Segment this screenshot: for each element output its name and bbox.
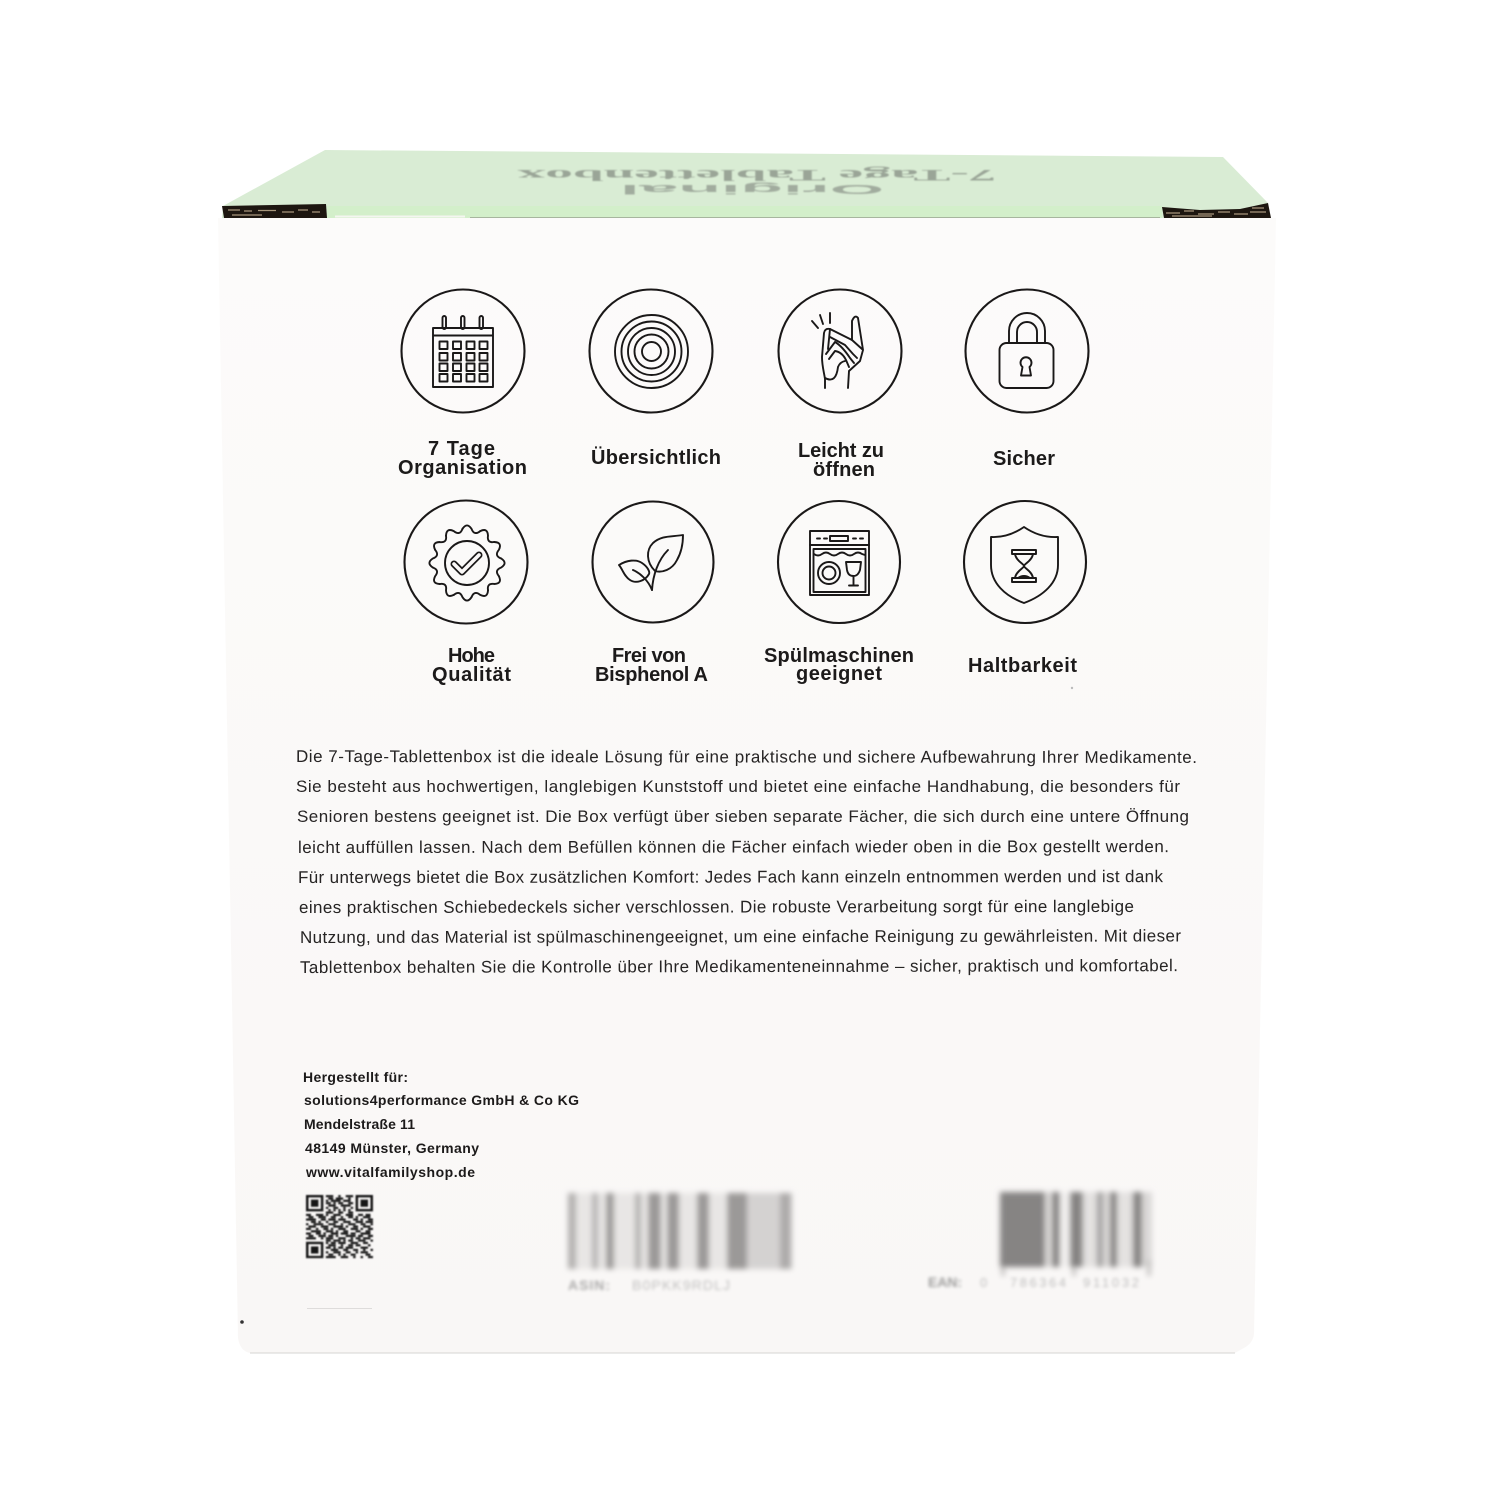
label: Hohe Qualität <box>432 645 511 686</box>
barcode label: EAN: 911032 <box>1083 1275 1139 1290</box>
text block: product description: Die 7-Tage-Tablettenbox ist die ideale Lösung für eine praktische und sichere Aufbewahrung Ihrer Medikamente. <box>296 747 1197 767</box>
barcode label: ASIN: ASIN: <box>568 1277 610 1293</box>
text block: product description: Senioren bestens geeignet ist. Die Box verfügt über sieben separate Fächer, die sich durch eine untere Öffnung <box>297 807 1189 826</box>
label: Leicht zu öffnen: öffnen <box>813 459 875 481</box>
text block: manufacturer address <box>303 1069 579 1180</box>
label: Spülmaschinen geeignet <box>764 645 914 685</box>
barcode label: ASIN <box>568 1277 730 1293</box>
label: Spülmaschinen geeignet: geeignet <box>796 663 882 685</box>
feature: 7 Tage Organisation <box>398 290 527 479</box>
label: Spülmaschinen geeignet: Spülmaschinen <box>764 645 914 667</box>
feature: Spülmaschinen geeignet <box>764 501 914 685</box>
icon: quality seal with check <box>404 500 528 624</box>
text block: product description: Für unterwegs bietet die Box zusätzlichen Komfort: Jedes Fach kann einzeln entnommen werden und ist dank <box>298 867 1164 887</box>
corrugated edge right <box>1162 203 1271 218</box>
lid text: upside-down product name <box>518 166 996 197</box>
label: Leicht zu öffnen: Leicht zu <box>798 440 884 462</box>
icon: dishwasher <box>778 501 900 623</box>
label: Übersichtlich: Übersichtlich <box>591 446 721 469</box>
icon: padlock <box>966 290 1088 412</box>
label: 7 Tage Organisation <box>398 438 527 479</box>
feature: Leicht zu öffnen <box>778 290 902 481</box>
text block: manufacturer address: Hergestellt für: <box>303 1069 408 1085</box>
label: Frei von Bisphenol A: Frei von <box>612 645 686 667</box>
label: Sicher: Sicher <box>993 448 1055 470</box>
barcode label: EAN <box>928 1274 1139 1290</box>
icon: calendar <box>402 290 524 412</box>
feature: Haltbarkeit <box>964 501 1086 677</box>
label: Frei von Bisphenol A: Bisphenol A <box>595 664 708 686</box>
text block: product description: Tablettenbox behalten Sie die Kontrolle über Ihre Medikamenteneinnahme – sicher, praktisch und komfortabel. <box>300 956 1178 977</box>
feature: Hohe Qualität <box>404 500 528 686</box>
label: Hohe Qualität: Hohe <box>448 645 495 667</box>
label: Hohe Qualität: Qualität <box>432 664 511 686</box>
panel: box lid (green top face) <box>222 150 1271 218</box>
feature: Frei von Bisphenol A <box>592 502 714 686</box>
barcode: EAN (blurred) <box>928 1192 1152 1290</box>
text block: product description: eines praktischen Schiebedeckels sicher verschlossen. Die robuste Verarbeitung sorgt für eine langlebige <box>299 897 1134 917</box>
text block: product description: Sie besteht aus hochwertigen, langlebigen Kunststoff und bietet eine einfache Handhabung, die besonders für <box>296 777 1180 796</box>
label: Leicht zu öffnen <box>798 440 884 481</box>
lid text: upside-down product name: 7-Tage Tablettenbox <box>518 166 996 183</box>
lid text: upside-down product name: Original <box>620 182 884 197</box>
label: 7 Tage Organisation: 7 Tage <box>428 438 495 460</box>
text block: manufacturer address: solutions4performance GmbH & Co KG <box>304 1092 579 1108</box>
feature: Übersichtlich <box>590 290 721 469</box>
panel: box front face <box>218 218 1276 1353</box>
label: Haltbarkeit: Haltbarkeit <box>968 655 1077 677</box>
label: Frei von Bisphenol A <box>595 645 708 686</box>
text block: manufacturer address: www.vitalfamilyshop.de <box>305 1164 475 1180</box>
feature: Sicher <box>966 290 1088 470</box>
label: 7 Tage Organisation: Organisation <box>398 457 527 479</box>
barcode label: ASIN: B0PKK9RDLJ <box>632 1277 730 1293</box>
barcode label: EAN: EAN: <box>928 1274 962 1290</box>
icon: leaves <box>592 502 714 622</box>
barcode: ASIN (blurred) <box>568 1193 792 1293</box>
text block: manufacturer address: Mendelstraße 11 <box>304 1116 415 1132</box>
barcode label: EAN: 786364 <box>1010 1275 1066 1290</box>
text block: product description: Nutzung, und das Material ist spülmaschinengeeignet, um eine einfache Reinigung zu gewährleisten. Mit dieser <box>300 926 1181 947</box>
QR code <box>306 1195 373 1258</box>
text block: product description <box>296 747 1197 977</box>
icon: pinching hand <box>778 290 902 412</box>
text block: product description: leicht auffüllen lassen. Nach dem Befüllen können die Fächer einfach wieder oben in die Box gestellt werden. <box>298 837 1169 857</box>
corrugated edge left <box>222 204 327 218</box>
icon: shield with hourglass <box>964 501 1086 623</box>
barcode label: EAN: 0 <box>980 1275 987 1290</box>
icon: concentric rings <box>590 290 712 412</box>
text block: manufacturer address: 48149 Münster, Germany <box>305 1140 479 1156</box>
